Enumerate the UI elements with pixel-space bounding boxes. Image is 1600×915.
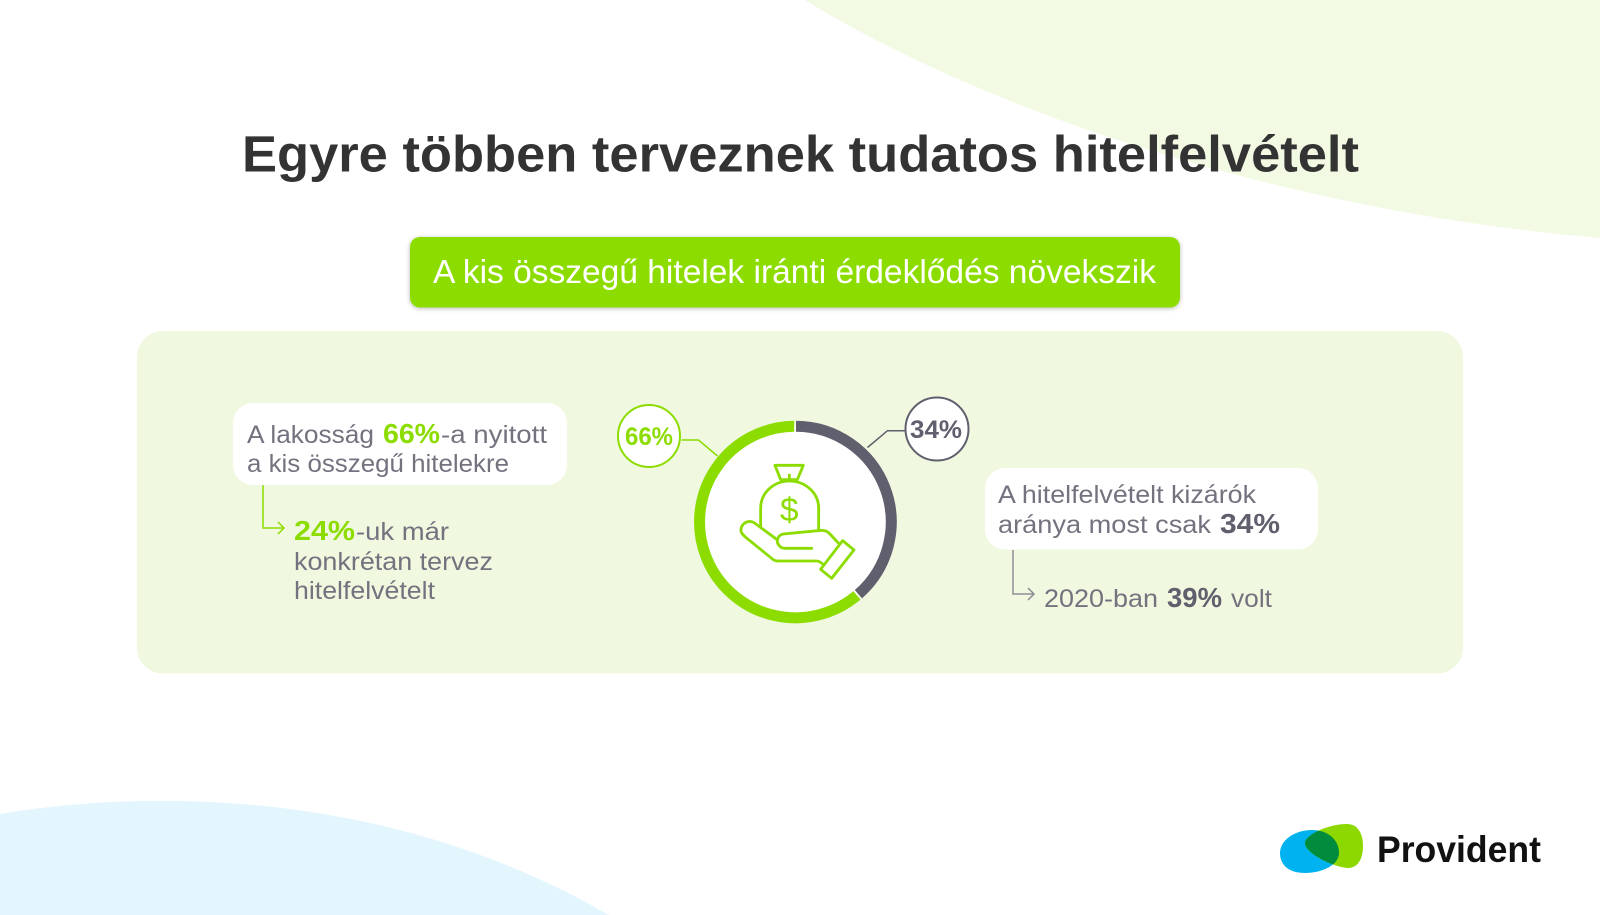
callout: open to small loans: -a nyitott bbox=[441, 421, 547, 449]
leader line: 66 percent bbox=[682, 440, 718, 456]
text block: 2020 comparison: 2020-ban bbox=[1044, 585, 1158, 613]
icon: hand holding money bag bbox=[741, 465, 854, 578]
callout: loan rejecters share bbox=[985, 468, 1318, 550]
callout: open to small loans: A lakosság bbox=[247, 421, 374, 449]
logo mark: overlapping shapes bbox=[1280, 824, 1363, 873]
text block: 24 percent plan a loan: -uk már bbox=[356, 518, 449, 546]
heading banner: A kis összegű hitelek iránti érdeklődés növekszik bbox=[433, 253, 1156, 290]
bubble: 34 percent bbox=[906, 398, 968, 460]
bubble: 34 percent: 34% bbox=[910, 416, 962, 444]
text block: 24 percent plan a loan: 24% bbox=[294, 515, 355, 546]
background shape: bottom left blue curve bbox=[0, 801, 609, 915]
title: Egyre többen terveznek tudatos hitelfelvételt bbox=[242, 126, 1359, 182]
text block: 2020 comparison: 39% bbox=[1167, 582, 1222, 613]
callout: loan rejecters share: A hitelfelvételt kizárók bbox=[998, 481, 1257, 509]
text block: 24 percent plan a loan bbox=[294, 515, 493, 605]
text block: 24 percent plan a loan: hitelfelvételt bbox=[294, 577, 435, 605]
bubble: 66 percent bbox=[618, 405, 680, 467]
callout: loan rejecters share: 34% bbox=[1220, 508, 1280, 539]
text block: 2020 comparison bbox=[1044, 582, 1272, 613]
heading banner bbox=[410, 237, 1180, 308]
donut segment: 34 percent bbox=[796, 426, 891, 594]
text block: 2020 comparison: volt bbox=[1231, 585, 1272, 613]
bubble: 66 percent: 66% bbox=[625, 423, 673, 451]
panel: survey results bbox=[137, 331, 1463, 674]
arrow: grey elbow bbox=[1013, 550, 1034, 600]
logo: Provident: Provident bbox=[1377, 829, 1541, 870]
callout: open to small loans bbox=[233, 403, 567, 485]
donut segment: 66 percent bbox=[700, 426, 857, 618]
callout: open to small loans: 66% bbox=[383, 418, 440, 449]
background shape: top right green curve bbox=[805, 0, 1600, 238]
leader line: 34 percent bbox=[868, 431, 905, 448]
arrow: green elbow bbox=[263, 485, 284, 534]
callout: loan rejecters share: aránya most csak bbox=[998, 511, 1212, 539]
logo: Provident bbox=[1280, 824, 1541, 873]
icon: hand holding money bag: $ bbox=[780, 492, 799, 529]
donut chart: 66 and 34 percent bbox=[618, 398, 968, 618]
text block: 24 percent plan a loan: konkrétan tervez bbox=[294, 548, 493, 576]
callout: open to small loans: a kis összegű hitelekre bbox=[247, 450, 509, 478]
